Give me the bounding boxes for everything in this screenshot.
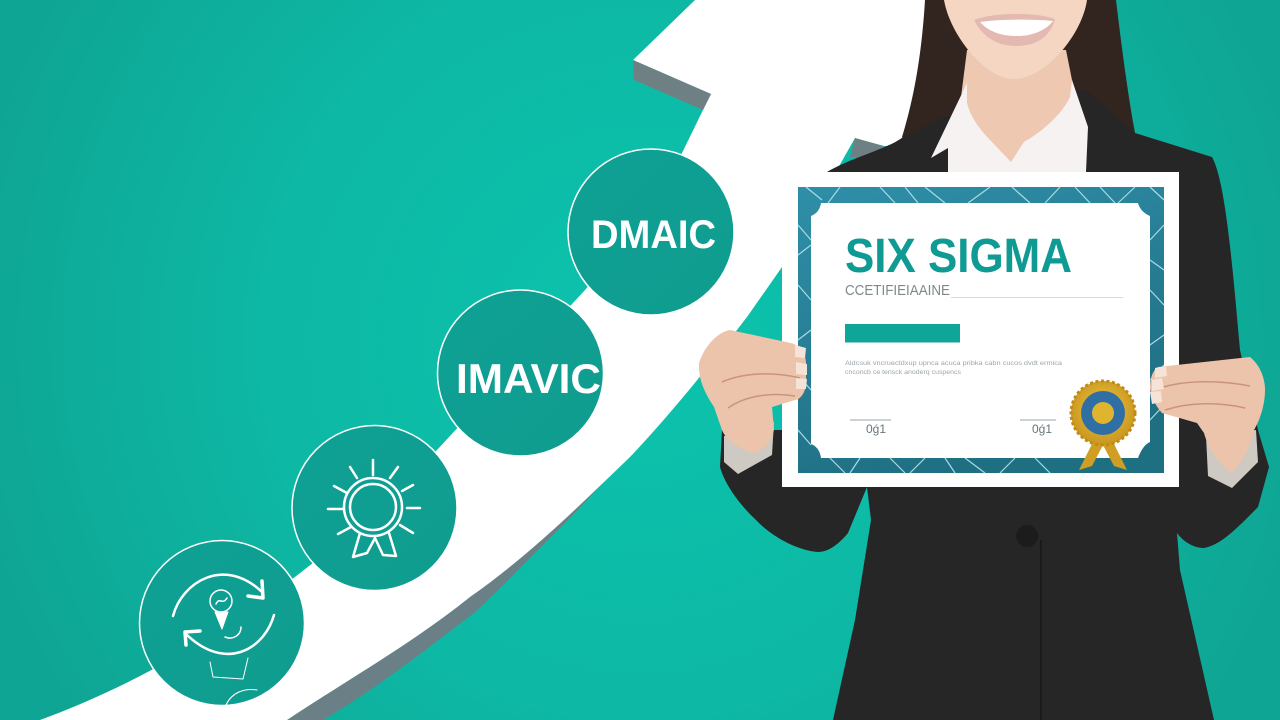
- certificate border: [798, 187, 1164, 473]
- smile: [974, 14, 1055, 46]
- finger creases: [722, 374, 800, 408]
- label: IMAVIC: IMAVIC: [456, 355, 601, 402]
- left hand: [699, 330, 807, 453]
- jacket centre seam: [1040, 540, 1042, 720]
- jacket: [720, 90, 1269, 720]
- certificate body text: [845, 361, 1063, 376]
- right signature: 0ǵ1: [1032, 422, 1052, 436]
- shirt collar: [931, 80, 1088, 172]
- jacket button: [1016, 525, 1038, 547]
- arrow body: [40, 0, 930, 720]
- fingernails: [795, 345, 807, 389]
- step circle: improvement loop icon: [140, 540, 304, 706]
- step circle: award icon: [292, 426, 457, 590]
- certificate subtitle: CCETIFIEIAAINE: [845, 282, 950, 299]
- certificate body text: cnconcb ce tensck anoderq cuspencs: [845, 370, 961, 376]
- name bar: [845, 324, 960, 342]
- arrow notch teal gap: [836, 157, 870, 170]
- certificate body text: Aldcsuk vncruectdxup upnca acuca pribka cabn cucos dvdt ermica: [845, 361, 1063, 367]
- neck: [960, 50, 1076, 170]
- arrow notch depth: left barb: [633, 60, 711, 110]
- growth arrow: [40, 0, 930, 720]
- certificate inner panel: [811, 203, 1150, 458]
- right cuff: [1206, 430, 1258, 488]
- step circle: IMAVIC: [438, 290, 604, 456]
- icon: ribbon award with rays: [328, 460, 420, 557]
- left signature: 0ǵ1: [866, 422, 886, 436]
- hair: [902, 0, 1135, 170]
- fingernails: [1150, 366, 1167, 404]
- certificate title: SIX SIGMA: [845, 230, 1072, 283]
- border pattern: [798, 187, 1164, 473]
- certificate: [782, 172, 1179, 487]
- right hand: [1150, 357, 1265, 473]
- arrow shadow: lower edge: [287, 460, 625, 720]
- label: DMAIC: DMAIC: [591, 213, 716, 257]
- left signature: [850, 420, 891, 436]
- gold seal: [1071, 381, 1135, 470]
- right signature: [1020, 420, 1056, 436]
- face: [944, 0, 1087, 79]
- arrow notch depth: right barb: [850, 138, 884, 157]
- left cuff: [724, 422, 774, 474]
- certificate paper: [782, 172, 1179, 487]
- finger creases: [1160, 382, 1250, 410]
- step circle: DMAIC: [568, 149, 734, 315]
- person: businesswoman: [720, 0, 1269, 720]
- icon: cycle with light bulb: [173, 575, 274, 705]
- subtitle rule: [951, 296, 1123, 298]
